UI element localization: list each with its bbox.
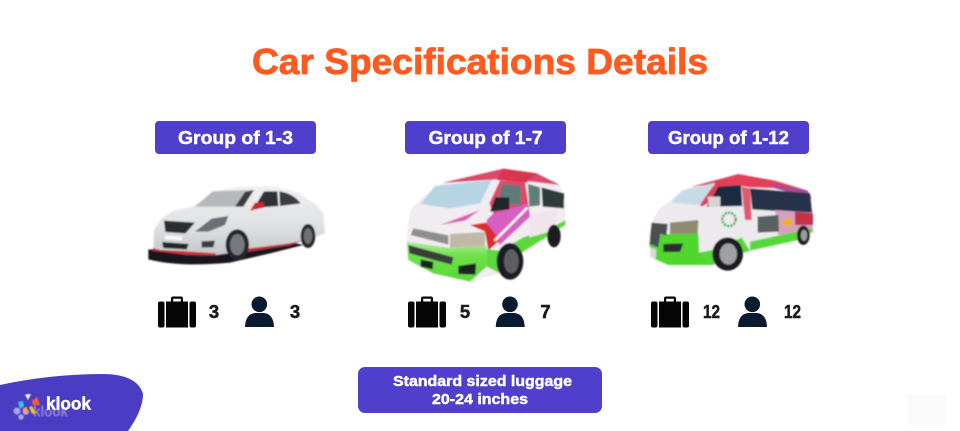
panel: group of 1-12	[648, 121, 813, 328]
icon: luggage	[158, 296, 196, 328]
image: silver sedan	[148, 186, 325, 264]
logo ghost mark: klook	[33, 404, 69, 420]
logo ghost mark	[14, 404, 69, 420]
luggage count: 12	[703, 301, 720, 322]
luggage count: 3	[209, 301, 219, 322]
image: green and red van	[649, 174, 813, 271]
callout: luggage size note: Standard sized luggage	[393, 374, 572, 390]
panel: group of 1-7	[405, 121, 566, 328]
badge: group of 1-12	[648, 121, 809, 154]
icon: luggage	[651, 296, 689, 328]
icon: passenger	[738, 296, 767, 327]
badge: group of 1-12: Group of 1-12	[668, 128, 789, 148]
icon: luggage	[408, 296, 446, 328]
image: colourful van	[407, 169, 565, 282]
badge: group of 1-3: Group of 1-3	[178, 128, 293, 148]
logo colour mark	[18, 394, 40, 414]
badge: group of 1-3	[155, 121, 316, 154]
luggage count: 5	[460, 301, 470, 322]
logo wordmark: klook	[46, 394, 91, 414]
icon: passenger	[245, 296, 274, 327]
badge: group of 1-7	[405, 121, 566, 154]
panel: group of 1-3	[148, 121, 325, 328]
title: Car Specifications Details	[252, 41, 708, 82]
faint corner box	[907, 394, 946, 425]
callout: luggage size note	[358, 367, 602, 413]
callout: luggage size note: 20-24 inches	[432, 392, 528, 408]
icon: passenger	[496, 296, 525, 327]
passenger count: 3	[290, 301, 300, 322]
logo: klook badge	[0, 374, 143, 431]
badge: group of 1-7: Group of 1-7	[428, 128, 542, 148]
passenger count: 7	[540, 301, 551, 322]
passenger count: 12	[784, 301, 801, 322]
